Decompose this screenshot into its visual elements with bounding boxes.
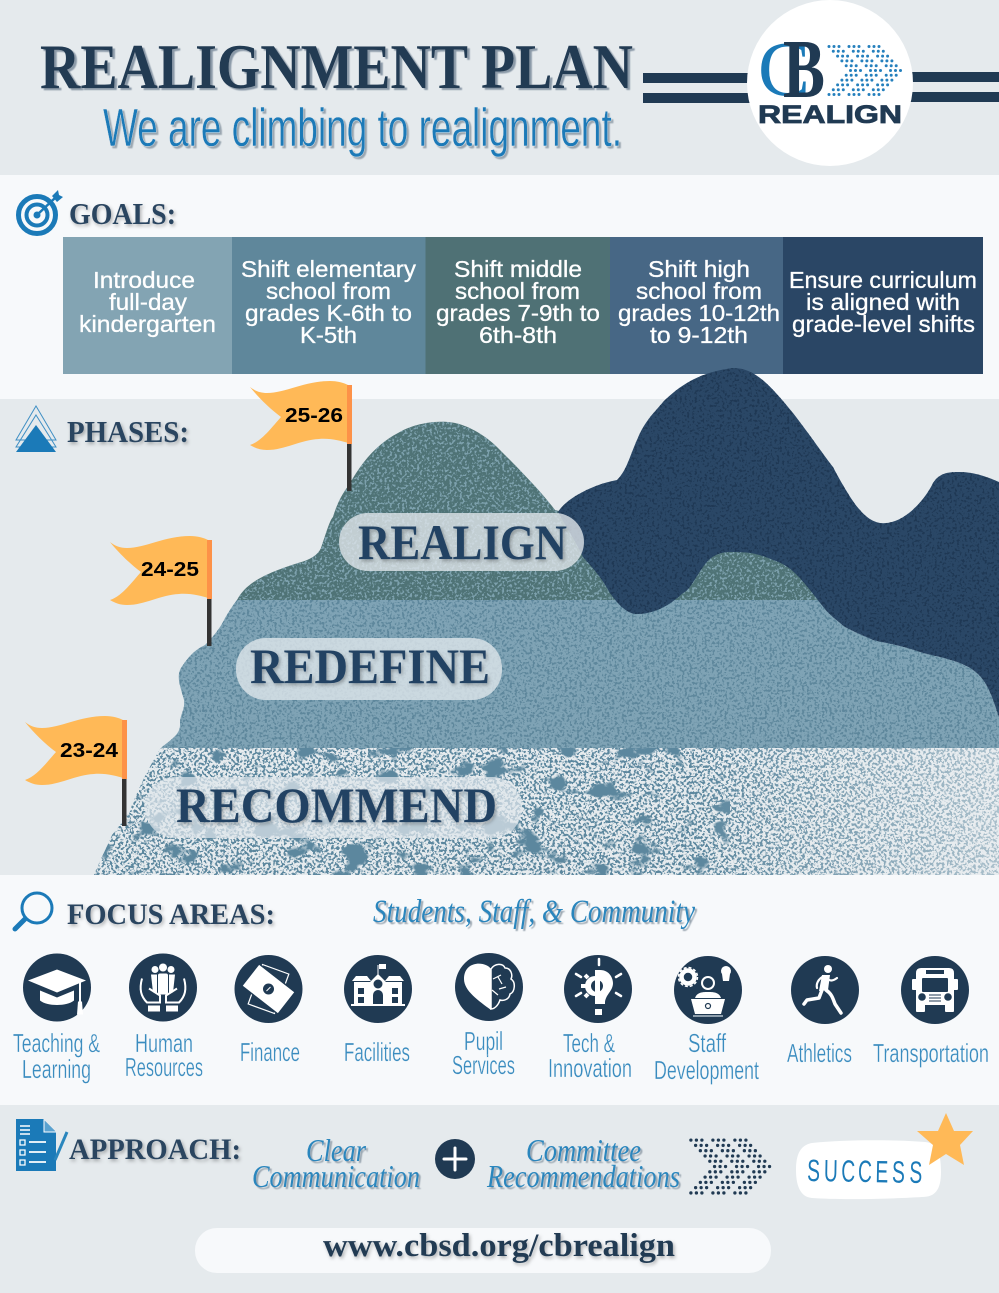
- header stripes: [643, 72, 999, 103]
- focus: finance: Finance: [240, 1037, 300, 1067]
- goal 1: [63, 237, 232, 374]
- focus: tech & innovation: Tech &: [563, 1028, 615, 1058]
- arrow: dotted chevrons: [691, 1140, 771, 1193]
- goal 3: grades 7-9th to: [436, 300, 600, 326]
- focus: human resources: Resources: [125, 1052, 203, 1082]
- focus: tech & innovation: [548, 955, 632, 1083]
- icon: school building: [344, 955, 412, 1023]
- focus: human resources: Human: [135, 1028, 193, 1058]
- icon: person at laptop: [674, 956, 742, 1024]
- goal 3: Shift middle: [454, 256, 582, 282]
- logo: CB Realign: B: [783, 23, 825, 116]
- focus: finance: [234, 955, 302, 1067]
- focus: pupil services: [452, 953, 523, 1080]
- label: redefine: REDEFINE: [250, 638, 490, 694]
- focus: teaching & learning: Teaching &: [13, 1028, 100, 1058]
- mountain layer: realign: [230, 415, 830, 610]
- logo: CB Realign: REALIGN: [758, 101, 902, 129]
- focus: pupil services: Services: [452, 1050, 515, 1080]
- goal 4: grades 10-12th: [618, 300, 780, 326]
- focus: staff development: Development: [654, 1055, 760, 1085]
- section background: phases: [0, 399, 999, 875]
- badge: success: SUCCESS: [807, 1155, 923, 1190]
- focus: facilities: [344, 955, 412, 1067]
- chart: mountain phases: [90, 365, 999, 875]
- goal 3: [426, 237, 610, 374]
- flag: 24-25: [110, 536, 212, 646]
- focus: staff development: Staff: [688, 1028, 727, 1058]
- focus: teaching & learning: [13, 954, 100, 1084]
- goal 2: [232, 237, 426, 374]
- flag: 23-24: 23-24: [60, 740, 119, 762]
- heading: approach: APPROACH:: [69, 1133, 241, 1166]
- icon: magnifier: [15, 893, 52, 929]
- icon: graduation cap: [23, 954, 91, 1022]
- mountain layer: back range: [550, 365, 999, 725]
- focus: human resources: [125, 954, 203, 1082]
- logo: CB Realign: [747, 0, 913, 166]
- logo: CB Realign: C: [758, 25, 810, 112]
- goal 4: to 9-12th: [650, 322, 748, 348]
- focus: athletics: Athletics: [787, 1038, 852, 1068]
- goal 5: is aligned with: [806, 289, 960, 315]
- goal 4: [610, 237, 783, 374]
- goal 2: grades K-6th to: [245, 300, 412, 326]
- icon: school bus: [901, 956, 969, 1024]
- icon: runner: [791, 956, 859, 1024]
- goal 1: Introduce: [93, 267, 195, 293]
- goal 5: [783, 237, 983, 374]
- icon: phases triangles: [16, 406, 56, 452]
- badge: success: [796, 1140, 941, 1199]
- goal 3: 6th-8th: [479, 322, 557, 348]
- goal 1: full-day: [109, 289, 188, 315]
- focus: pupil services: Pupil: [464, 1026, 503, 1056]
- text: clear communication: Communication: [252, 1158, 420, 1194]
- icon: lightbulb gear: [564, 955, 632, 1023]
- heading: goals: GOALS:: [69, 196, 176, 231]
- text: clear communication: Clear: [306, 1132, 366, 1168]
- tagline: students, staff & community: Students, Staff, & Community: [373, 894, 695, 930]
- icon: checklist document: [16, 1119, 67, 1171]
- goal 3: school from: [455, 278, 580, 304]
- icon: target: [18, 190, 63, 234]
- focus: teaching & learning: Learning: [22, 1054, 91, 1084]
- heading: focus areas: FOCUS AREAS:: [67, 898, 275, 931]
- flag: 25-26: 25-26: [285, 405, 343, 427]
- goal 5: grade-level shifts: [792, 311, 975, 337]
- heading: phases: PHASES:: [67, 414, 189, 449]
- goal 5: Ensure curriculum: [789, 267, 977, 293]
- mountain layer: redefine: [155, 598, 999, 750]
- icon: plus: [435, 1139, 475, 1179]
- icon: banknotes: [234, 955, 302, 1023]
- text: clear communication: [252, 1132, 420, 1194]
- focus: athletics: [787, 956, 859, 1068]
- focus: staff development: [654, 956, 760, 1085]
- text: committee recommendations: Committee: [526, 1132, 641, 1168]
- text: committee recommendations: Recommendations: [486, 1158, 680, 1194]
- flag: 23-24: [25, 716, 127, 826]
- focus: tech & innovation: Innovation: [548, 1053, 632, 1083]
- goal 2: Shift elementary: [241, 256, 417, 282]
- icon: star: [917, 1113, 973, 1165]
- goal 2: school from: [266, 278, 391, 304]
- label: realign: REALIGN: [358, 514, 567, 570]
- subtitle: We are climbing to realignment.: [103, 98, 622, 158]
- focus: facilities: Facilities: [344, 1037, 410, 1067]
- flag: 25-26: [250, 381, 352, 491]
- focus: transportation: [873, 956, 989, 1068]
- flag: 24-25: 24-25: [141, 559, 199, 581]
- panel: goals table: [63, 237, 983, 374]
- mountain layer: recommend: [90, 748, 999, 875]
- url pill: [195, 1228, 771, 1273]
- title: REALIGNMENT PLAN: [40, 31, 633, 102]
- goal 1: kindergarten: [79, 311, 216, 337]
- goal 4: Shift high: [648, 256, 750, 282]
- url pill: www.cbsd.org/cbrealign: [323, 1228, 675, 1264]
- goal 2: K-5th: [300, 322, 357, 348]
- text: committee recommendations: [486, 1132, 680, 1194]
- icon: heart and brain: [455, 953, 523, 1021]
- goal 4: school from: [636, 278, 762, 304]
- icon: people in hands: [129, 954, 197, 1022]
- label: recommend: RECOMMEND: [176, 777, 497, 833]
